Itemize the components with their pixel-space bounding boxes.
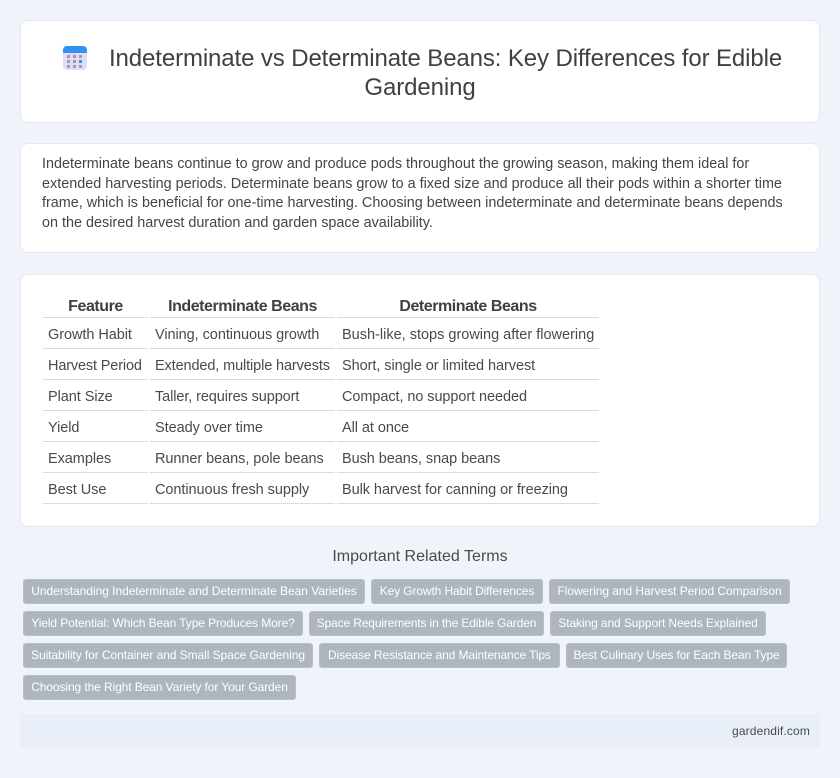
title card xyxy=(20,20,820,123)
comparison table: Continuous fresh supply xyxy=(155,482,309,498)
related terms tags: Understanding Indeterminate and Determinate Bean Varieties xyxy=(31,584,357,598)
header row xyxy=(43,298,599,318)
intro paragraph: Indeterminate beans continue to grow and produce pods throughout the growing season, making them ideal for xyxy=(42,156,749,172)
comparison table: Best Use xyxy=(48,482,106,498)
intro paragraph: frame, which is beneficial for one-time harvesting. Choosing between indeterminate and determinate beans depends xyxy=(42,195,783,211)
related terms tags: Key Growth Habit Differences xyxy=(380,584,534,598)
intro paragraph xyxy=(42,156,783,231)
comparison table: Taller, requires support xyxy=(155,389,299,405)
panel: comparison table xyxy=(20,274,820,527)
comparison table: All at once xyxy=(342,420,409,436)
comparison table: Short, single or limited harvest xyxy=(342,358,535,374)
related terms tags: Choosing the Right Bean Variety for Your Garden xyxy=(31,680,288,694)
comparison table: Harvest Period xyxy=(48,358,142,374)
comparison table: Growth Habit xyxy=(48,327,132,343)
footer bar xyxy=(20,714,820,748)
comparison table: Bush beans, snap beans xyxy=(342,451,500,467)
comparison table: Examples xyxy=(48,451,111,467)
comparison table: Vining, continuous growth xyxy=(155,327,319,343)
footer source text: gardendif.com xyxy=(732,724,810,738)
comparison table: Runner beans, pole beans xyxy=(155,451,324,467)
comparison table: Bush-like, stops growing after flowering xyxy=(342,327,594,343)
header row: Indeterminate Beans xyxy=(168,298,317,315)
panel: intro text xyxy=(20,143,820,253)
related terms tags: Suitability for Container and Small Space Gardening xyxy=(31,648,305,662)
intro paragraph: extended harvesting periods. Determinate beans grow to a fixed size and produce all their pods within a shorter time xyxy=(42,176,782,192)
icon: calendar xyxy=(63,46,87,70)
related terms tags: Flowering and Harvest Period Comparison xyxy=(557,584,782,598)
comparison table: Bulk harvest for canning or freezing xyxy=(342,482,568,498)
comparison table xyxy=(43,298,599,504)
related terms tags: Best Culinary Uses for Each Bean Type xyxy=(573,648,780,662)
related terms tags: Yield Potential: Which Bean Type Produces More? xyxy=(31,616,295,630)
title xyxy=(109,45,782,101)
title: Indeterminate vs Determinate Beans: Key Differences for Edible xyxy=(109,45,782,72)
related terms tags: Staking and Support Needs Explained xyxy=(558,616,758,630)
header row: Feature xyxy=(68,298,123,315)
comparison table: Steady over time xyxy=(155,420,263,436)
comparison table: Compact, no support needed xyxy=(342,389,527,405)
related terms tags xyxy=(23,579,790,700)
intro paragraph: on the desired harvest duration and garden space availability. xyxy=(42,215,433,231)
comparison table: Yield xyxy=(48,420,79,436)
related terms tags: Space Requirements in the Edible Garden xyxy=(317,616,536,630)
comparison table: Extended, multiple harvests xyxy=(155,358,330,374)
related terms tags: Disease Resistance and Maintenance Tips xyxy=(328,648,551,662)
header row: Determinate Beans xyxy=(399,298,537,315)
comparison table: Plant Size xyxy=(48,389,113,405)
related terms heading: Important Related Terms xyxy=(332,548,508,565)
title: Gardening xyxy=(364,74,476,101)
